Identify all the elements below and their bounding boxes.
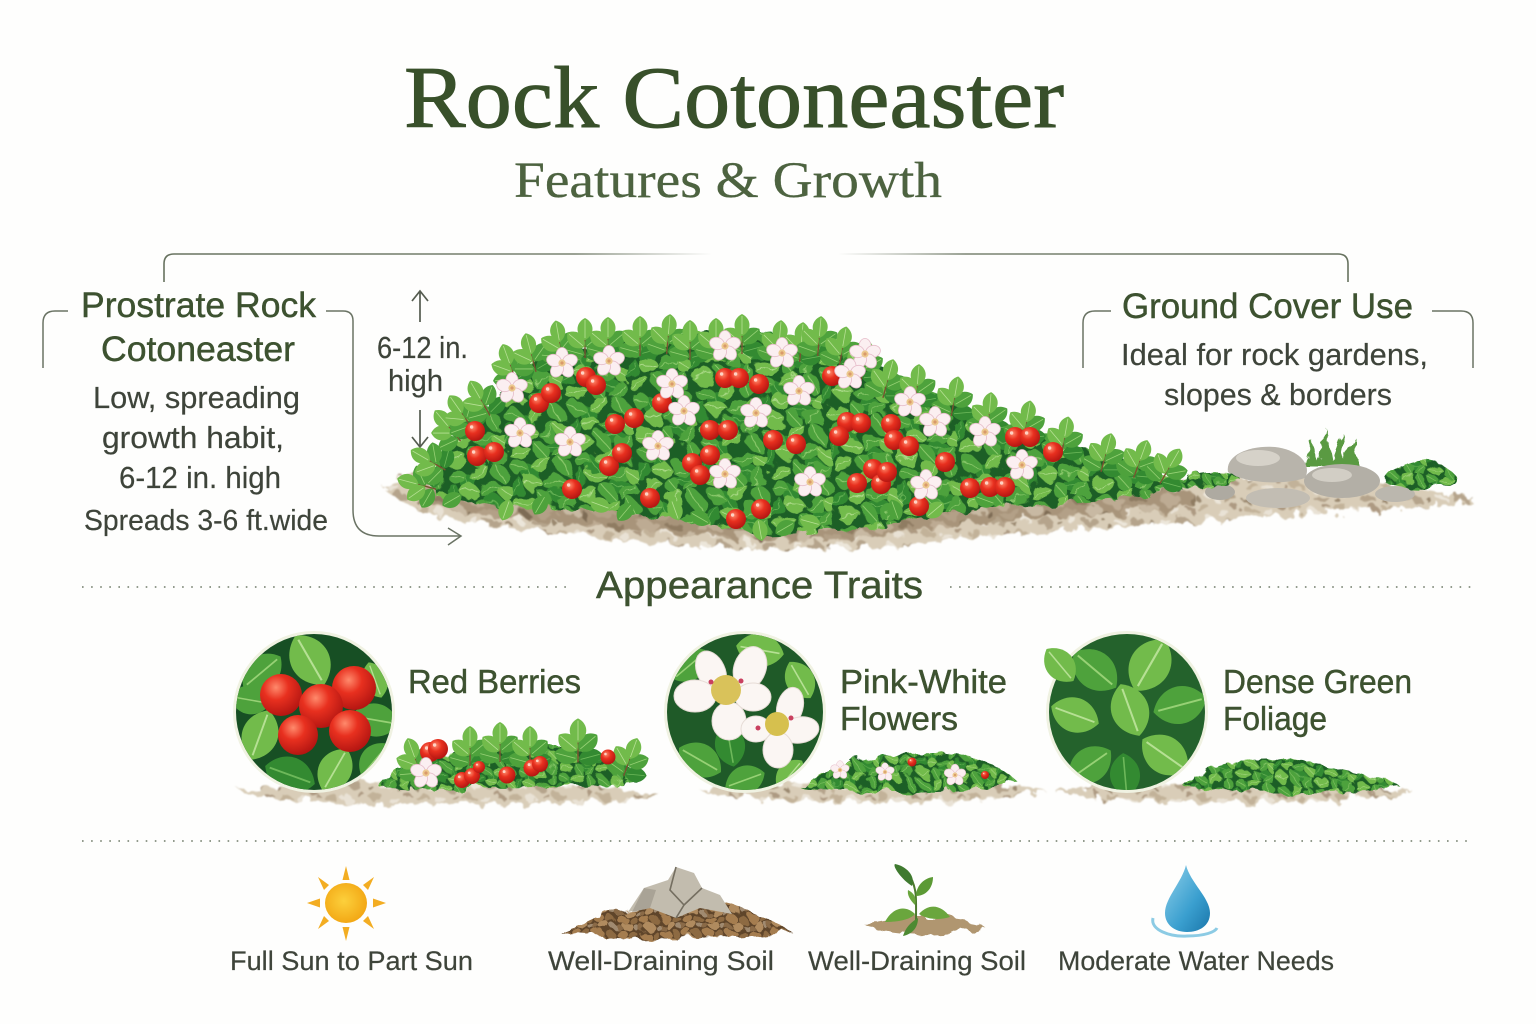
label: Moderate Water Needs [1058, 946, 1334, 976]
height label with arrows: high [388, 363, 443, 398]
description: slopes & borders [1164, 377, 1392, 412]
icon: seedling [865, 864, 982, 936]
description: Ideal for rock gardens, [1121, 337, 1428, 372]
left bracket with spread arrow [43, 311, 461, 545]
heading: Ground Cover Use [1122, 287, 1413, 326]
label: Foliage [1223, 700, 1327, 737]
heading [81, 286, 317, 369]
small plant with flowers [700, 752, 1045, 803]
icon: sun [307, 866, 386, 941]
description [84, 380, 328, 537]
need: water [1058, 865, 1334, 976]
small plant with berries [240, 718, 660, 805]
description: Spreads 3-6 ft.wide [84, 505, 328, 537]
label [1223, 663, 1412, 737]
label: Pink-White [840, 663, 1007, 700]
label: Flowers [840, 700, 958, 737]
foliage mound [435, 330, 1182, 536]
icon: flowers close-up [660, 630, 830, 801]
top bracket connector [164, 254, 1348, 282]
pink-white flowers [495, 330, 1039, 502]
description: growth habit, [102, 420, 284, 455]
subtitle: Features & Growth [514, 153, 942, 209]
rocks and grass at right [1170, 428, 1456, 508]
panel: prostrate rock cotoneaster [81, 286, 328, 537]
panel: ground cover use [1121, 287, 1428, 412]
icon: foliage close-up [1044, 631, 1208, 793]
label: Full Sun to Part Sun [230, 946, 473, 976]
trait: dense green foliage [1036, 629, 1412, 803]
dotted divider: appearance traits [82, 586, 1475, 588]
label [840, 663, 1007, 737]
right bracket [1083, 311, 1473, 368]
need: well-draining soil, rock [548, 867, 792, 976]
heading: Prostrate Rock [81, 286, 317, 325]
heading: Cotoneaster [101, 330, 295, 369]
height label with arrows: 6-12 in. [377, 330, 468, 365]
red berries [465, 366, 1063, 529]
height label with arrows [377, 291, 468, 447]
trait: red berries [227, 625, 660, 805]
title: Rock Cotoneaster [404, 50, 1064, 147]
icon: berries close-up [233, 631, 395, 793]
need: well-draining soil, seedling [808, 864, 1026, 976]
need: sun [230, 866, 473, 976]
lower loose leaves [439, 488, 998, 542]
description: 6-12 in. high [119, 460, 281, 495]
description [1121, 337, 1428, 412]
section heading: appearance traits: Appearance Traits [596, 565, 923, 607]
main plant illustration [385, 312, 1475, 549]
dotted divider: growing needs [82, 840, 1472, 842]
icon: rock and gravel pile [560, 867, 792, 939]
leaf sprigs on outline [391, 312, 1200, 513]
label: Well-Draining Soil [808, 946, 1026, 976]
label: Dense Green [1223, 663, 1412, 700]
label: Well-Draining Soil [548, 946, 774, 976]
icon: water drop [1153, 865, 1217, 936]
ground and gravel [385, 471, 1475, 549]
trait: pink-white flowers [660, 630, 1045, 803]
description: Low, spreading [93, 380, 300, 415]
small plant with foliage [1055, 759, 1412, 803]
label: Red Berries [408, 663, 581, 700]
